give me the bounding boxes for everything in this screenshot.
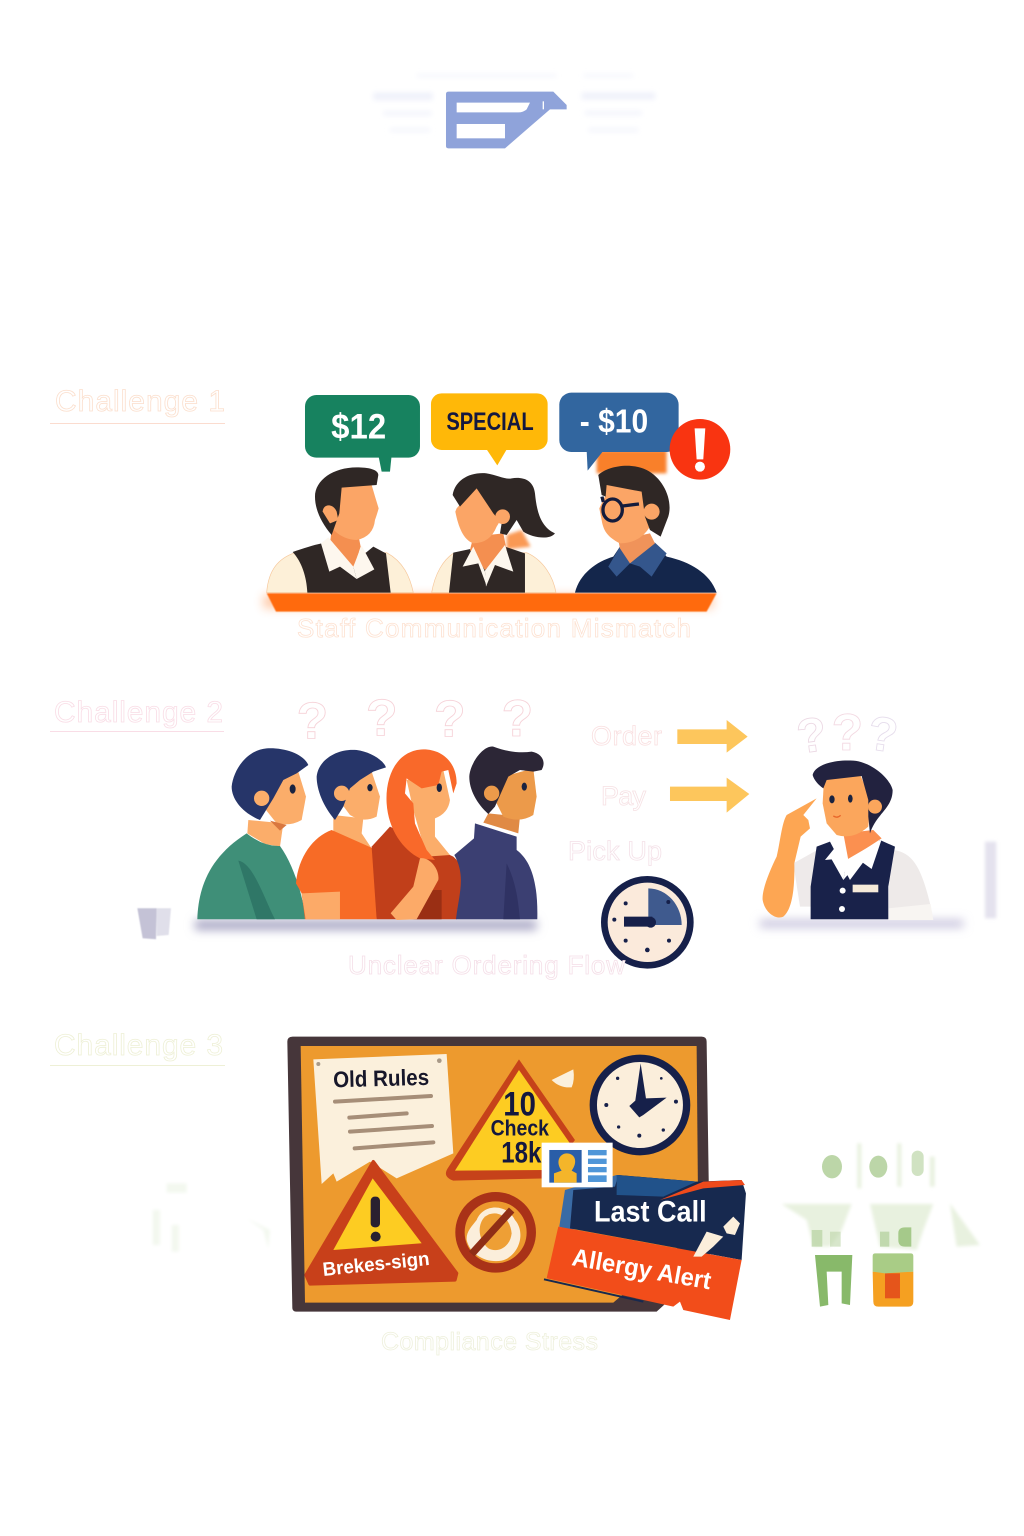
caption: unclear ordering flow: Unclear Ordering Flow [348, 950, 625, 980]
ghost post [985, 842, 996, 918]
question marks: ? [864, 706, 901, 764]
counter shadow [195, 920, 537, 930]
step labels: Pick Up [568, 836, 662, 866]
counter [263, 593, 717, 612]
challenge 2 heading: Challenge 2 [54, 696, 223, 729]
orange drink [873, 1253, 913, 1307]
warning triangle: check: 18k [501, 1137, 542, 1170]
id card [542, 1143, 613, 1187]
speech bubble: special [431, 393, 548, 465]
alert icon [670, 419, 730, 480]
panel: waiting customers [137, 688, 544, 939]
speech bubble: special: SPECIAL [446, 409, 534, 436]
customer with orange hair [372, 749, 468, 920]
clock [604, 879, 690, 965]
speech bubble: $12: $12 [331, 407, 386, 446]
question marks: ? [434, 690, 466, 748]
question marks: ? [297, 692, 328, 750]
panel: confused server [604, 703, 996, 965]
faded right figures [782, 1143, 980, 1307]
torn paper pieces [693, 1217, 740, 1257]
caption: compliance stress: Compliance Stress [381, 1328, 598, 1356]
customer in green [197, 748, 308, 919]
caption: staff communication mismatch: Staff Communication Mismatch [297, 613, 691, 643]
old rules note [313, 1054, 453, 1184]
question marks [793, 703, 901, 765]
step labels [568, 721, 662, 866]
arrow: pay [670, 778, 749, 813]
warning triangle: check: 10 [503, 1086, 536, 1124]
question marks: ? [502, 689, 533, 747]
faded left figures [153, 1183, 270, 1252]
figure heads [812, 1151, 924, 1247]
white chip [552, 1069, 574, 1087]
prohibition sign [460, 1197, 531, 1268]
step labels: Order [591, 721, 662, 751]
speech bubble: -$10 [559, 393, 679, 473]
allergy alert notice [544, 1227, 742, 1320]
warning triangle: brakes sign [306, 1162, 457, 1284]
question marks: ? [793, 707, 830, 765]
header icon [373, 75, 655, 148]
allergy alert notice: Allergy Alert [570, 1244, 713, 1295]
old rules note: Old Rules [333, 1064, 429, 1092]
panel: compliance notice board [287, 1037, 746, 1320]
question marks [297, 688, 533, 750]
staff member 1 [267, 467, 413, 593]
last call notice: Last Call [594, 1195, 707, 1228]
question marks: ? [366, 688, 398, 746]
staff member 2 [432, 473, 556, 593]
cup [137, 908, 171, 939]
speech bubble: $12 [305, 395, 420, 472]
wall clock [593, 1058, 687, 1152]
step labels: Pay [601, 781, 646, 811]
challenge 3 heading: Challenge 3 [54, 1029, 223, 1062]
ghost upper bodies [782, 1143, 980, 1250]
speech bubble: -$10: - $10 [580, 404, 648, 441]
challenge 1 heading: Challenge 1 [55, 385, 225, 418]
customer in navy [454, 747, 544, 919]
warning triangle: check [446, 1059, 575, 1181]
customer in orange [296, 750, 386, 919]
warning triangle: check: Check [491, 1115, 550, 1140]
last call notice [559, 1175, 746, 1260]
warning triangle: brakes sign: Brekes-sign [322, 1249, 431, 1281]
board [287, 1037, 710, 1312]
question marks: ? [832, 703, 863, 761]
green trousers [815, 1255, 852, 1307]
customer with glasses [575, 466, 717, 593]
server [763, 760, 933, 920]
arrow: order [677, 720, 748, 753]
server shadow [760, 920, 963, 927]
panel: staff communication mismatch [263, 393, 730, 612]
